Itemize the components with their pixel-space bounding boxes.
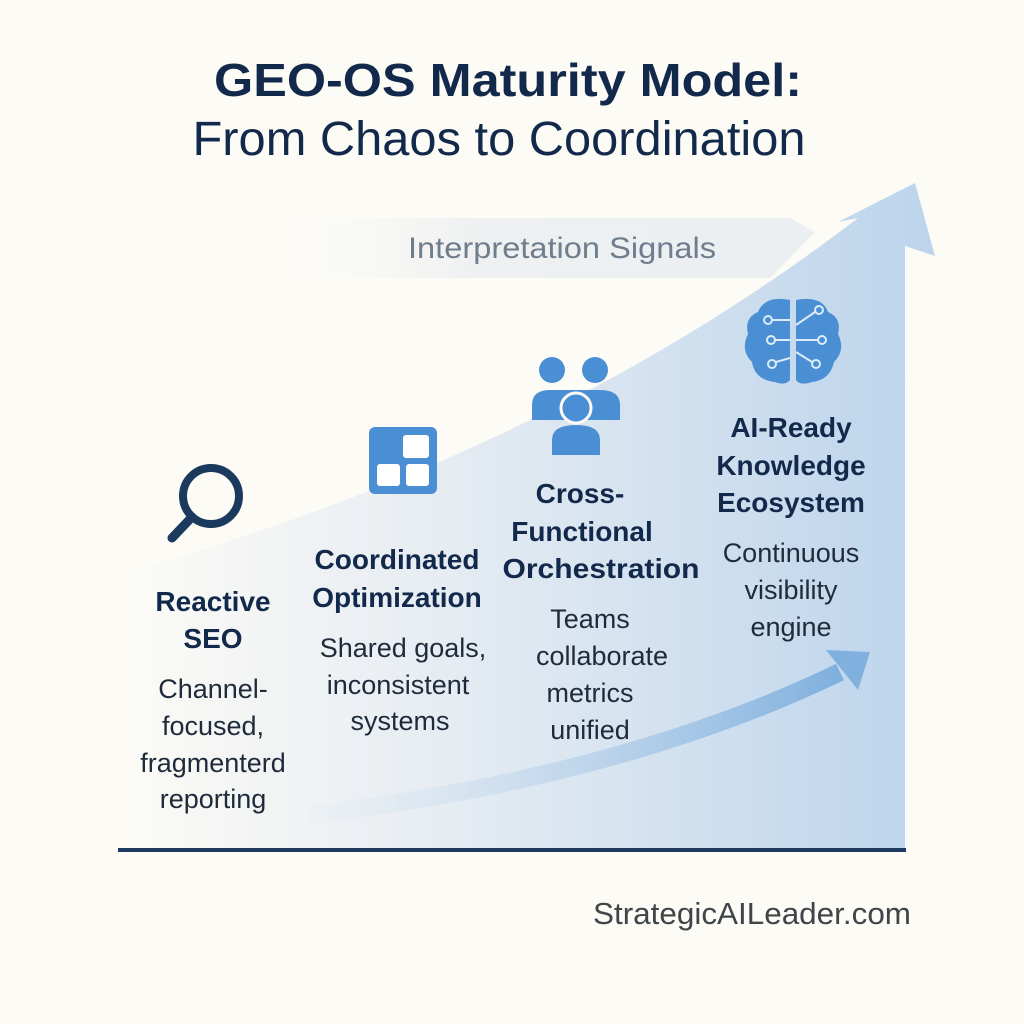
icon: team	[532, 357, 620, 455]
title	[192, 54, 806, 166]
icon: brain	[745, 299, 841, 384]
stage 2: Coordinated Optimization: inconsistent	[327, 670, 470, 700]
stage 1: Reactive SEO: focused,	[162, 711, 264, 741]
stage 2: Coordinated Optimization: systems	[350, 706, 450, 736]
banner: Interpretation Signals: Interpretation Signals	[408, 232, 716, 265]
stage 2: Coordinated Optimization	[312, 544, 486, 736]
stage 2: Coordinated Optimization: Optimization	[312, 582, 482, 613]
title: GEO-OS Maturity Model:	[214, 54, 802, 106]
stage 2: Coordinated Optimization: Coordinated	[315, 544, 479, 575]
stage 3: Cross-Functional Orchestration: Orchestration	[502, 553, 700, 584]
stage 4: AI-Ready Knowledge Ecosystem: Continuous	[723, 538, 859, 568]
stage 4: AI-Ready Knowledge Ecosystem	[716, 412, 866, 642]
stage 3: Cross-Functional Orchestration: Cross-	[536, 478, 624, 509]
stage 3: Cross-Functional Orchestration: collaborate	[536, 641, 668, 671]
baseline	[118, 848, 906, 852]
stage 3: Cross-Functional Orchestration: unified	[550, 715, 630, 745]
icon: grid	[369, 427, 437, 494]
stage 4: AI-Ready Knowledge Ecosystem: engine	[750, 612, 832, 642]
inner progress arrow	[310, 650, 870, 815]
stage 2: Coordinated Optimization: Shared goals,	[320, 633, 486, 663]
stage 1: Reactive SEO: SEO	[183, 623, 243, 654]
title: From Chaos to Coordination	[192, 113, 806, 166]
stage 3: Cross-Functional Orchestration: metrics	[546, 678, 634, 708]
banner: Interpretation Signals	[250, 218, 815, 278]
stage 4: AI-Ready Knowledge Ecosystem: visibility	[744, 575, 838, 605]
icon: magnifier	[172, 468, 239, 538]
stage 4: AI-Ready Knowledge Ecosystem: Ecosystem	[717, 487, 865, 518]
stage 1: Reactive SEO: fragmenterd	[140, 748, 286, 778]
stage 1: Reactive SEO	[140, 586, 286, 814]
stage 3: Cross-Functional Orchestration: Teams	[550, 604, 630, 634]
stage 1: Reactive SEO: reporting	[160, 784, 266, 814]
stage 1: Reactive SEO: Channel-	[158, 674, 268, 704]
stage 3: Cross-Functional Orchestration: Functional	[511, 516, 653, 547]
stage 3: Cross-Functional Orchestration	[502, 478, 700, 745]
footer: StrategicAILeader.com	[593, 896, 911, 931]
stage 4: AI-Ready Knowledge Ecosystem: AI-Ready	[730, 412, 852, 443]
stage 4: AI-Ready Knowledge Ecosystem: Knowledge	[716, 450, 866, 481]
growth area with big arrow	[118, 183, 935, 848]
stage 1: Reactive SEO: Reactive	[155, 586, 271, 617]
